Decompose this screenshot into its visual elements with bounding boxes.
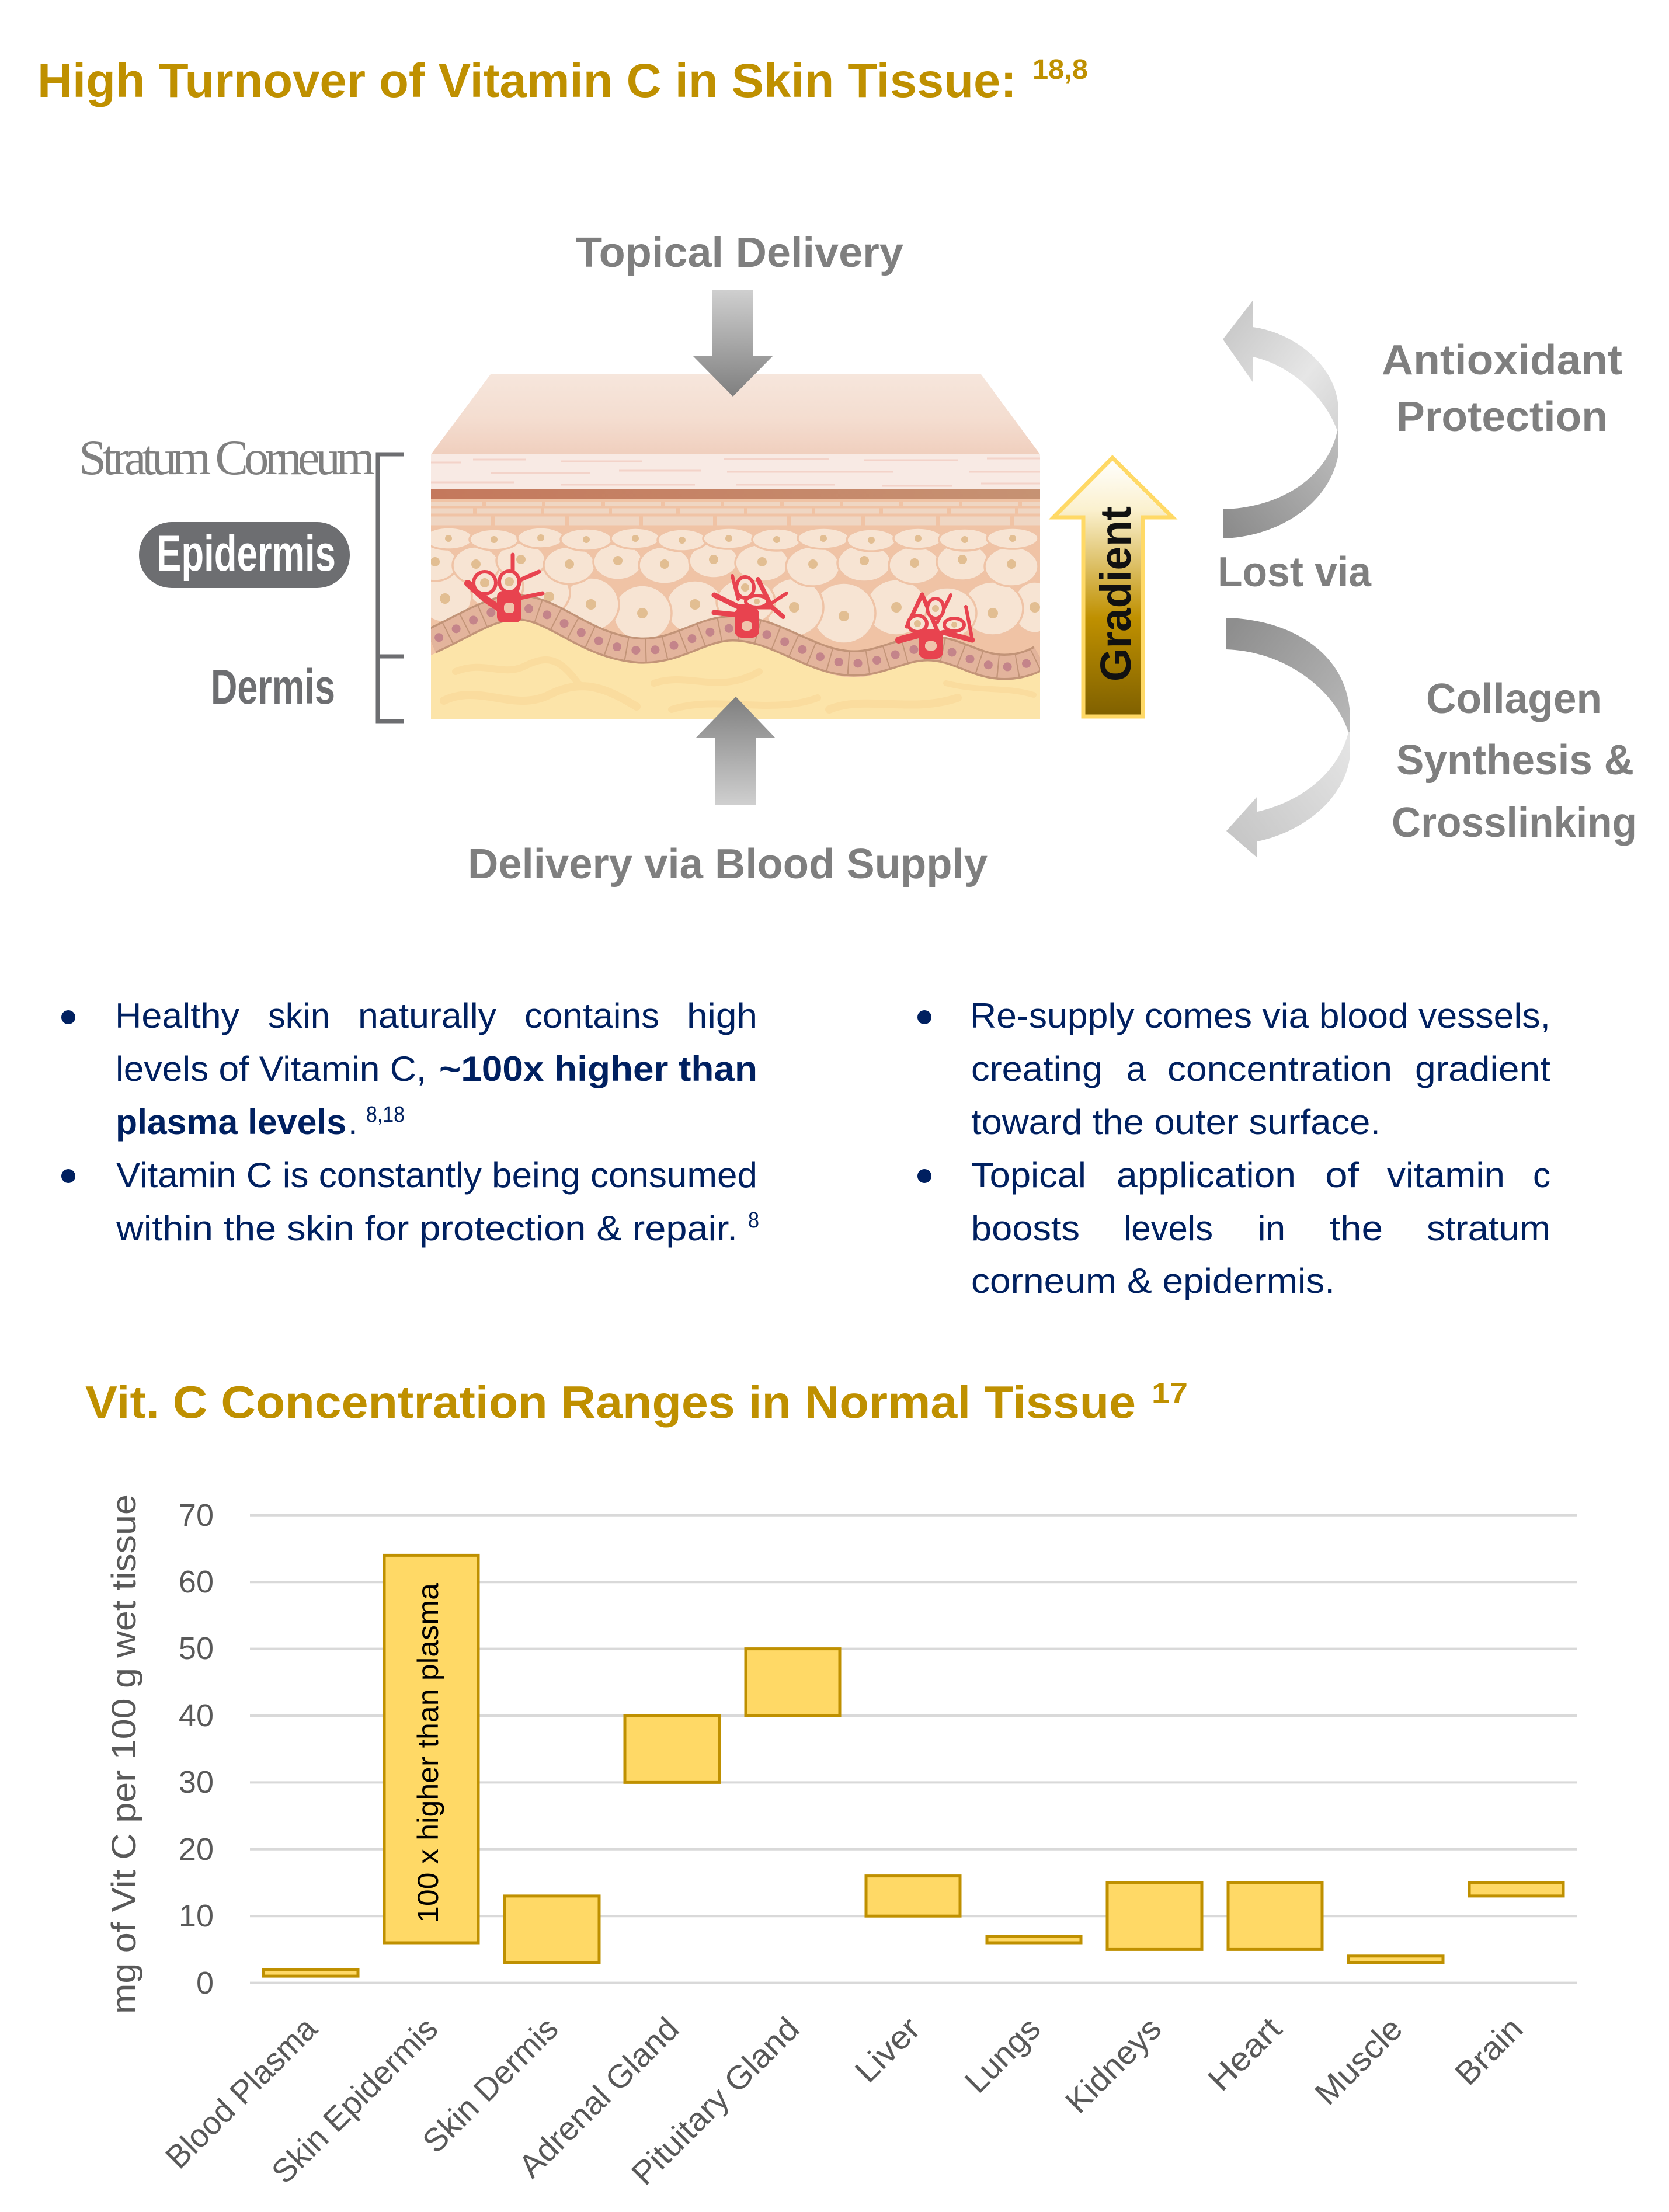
text block: left bullets: plasma levels xyxy=(116,1102,346,1142)
bar chart: vitamin C ranges xyxy=(105,1494,1577,2192)
x axis labels: Muscle xyxy=(1308,2010,1409,2112)
text block: right bullets: levels xyxy=(1124,1209,1213,1248)
arrow: gradient: Gradient xyxy=(1091,506,1140,681)
text block: left bullets: 8,18 xyxy=(366,1102,405,1127)
text block: left bullets: skin xyxy=(268,996,330,1035)
bar: kidneys xyxy=(1107,1883,1202,1949)
bar: skin epidermis xyxy=(384,1555,478,1943)
y axis title: mg of Vit C per 100 g wet tissue xyxy=(105,1494,143,2014)
text block: left bullets: levels of Vitamin C, xyxy=(116,1049,426,1088)
bar: skin epidermis: 100 x higher than plasma xyxy=(412,1583,444,1923)
label: delivery via blood supply: Delivery via Blood Supply xyxy=(468,841,988,888)
y axis ticks xyxy=(179,1498,214,2001)
label: stratum corneum: Stratum Corneum xyxy=(79,430,375,485)
bar: brain xyxy=(1469,1883,1563,1896)
bar: skin dermis xyxy=(505,1896,599,1963)
text block: right bullets: gradient xyxy=(1415,1049,1550,1088)
text block: left bullets: . xyxy=(348,1102,358,1142)
label: antioxidant protection xyxy=(1382,337,1622,440)
label: antioxidant protection: Antioxidant xyxy=(1382,337,1622,384)
y axis ticks: 10 xyxy=(179,1898,214,1933)
y axis ticks: 0 xyxy=(196,1966,214,2001)
text block: left bullets: 8 xyxy=(748,1208,759,1233)
title: High Turnover of Vitamin C in Skin Tissue: xyxy=(37,54,1017,107)
label: antioxidant protection: Protection xyxy=(1396,394,1608,440)
text block: left bullets xyxy=(61,996,759,1248)
x axis labels: Kidneys xyxy=(1058,2010,1168,2120)
bar: liver xyxy=(866,1876,960,1916)
text block: left bullets: ~100x higher than xyxy=(439,1049,757,1088)
text block: right bullets: toward the outer surface. xyxy=(971,1102,1381,1142)
panel: skin diagram xyxy=(79,229,1637,888)
arrow: topical delivery down xyxy=(693,290,773,397)
y axis ticks: 50 xyxy=(179,1631,214,1666)
curved arrow: collagen xyxy=(1226,618,1350,858)
text block: right bullets: c xyxy=(1533,1156,1550,1195)
y axis ticks: 40 xyxy=(179,1698,214,1733)
x axis labels: Heart xyxy=(1201,2010,1289,2098)
y axis ticks: 60 xyxy=(179,1564,214,1599)
x axis labels xyxy=(158,2009,1529,2192)
text block: right bullets xyxy=(917,996,1550,1300)
label: lost via: Lost via xyxy=(1218,549,1372,596)
label: collagen synthesis and crosslinking: Crosslinking xyxy=(1392,799,1637,846)
text block: left bullets: naturally xyxy=(358,996,496,1035)
text block: right bullets: stratum xyxy=(1427,1209,1550,1248)
text block: right bullets: a xyxy=(1126,1049,1146,1088)
arrow: blood supply up xyxy=(696,697,776,805)
text block: right bullets: vitamin xyxy=(1387,1156,1505,1195)
label: collagen synthesis and crosslinking xyxy=(1392,676,1637,846)
bar: pituitary gland xyxy=(746,1649,840,1716)
heading: concentration ranges: Vit. C Concentration Ranges in Normal Tissue xyxy=(85,1376,1136,1428)
bar: heart xyxy=(1228,1883,1322,1949)
text block: right bullets: Re-supply comes via blood vessels, xyxy=(970,996,1550,1035)
curved arrow: antioxidant xyxy=(1223,301,1338,538)
x axis labels: Brain xyxy=(1448,2010,1529,2092)
bar: adrenal gland xyxy=(625,1716,719,1782)
text block: right bullets: the xyxy=(1330,1209,1383,1248)
x axis labels: Skin Epidermis xyxy=(264,2010,444,2190)
heading: concentration ranges: 17 xyxy=(1152,1377,1188,1410)
x axis labels: Liver xyxy=(847,2010,927,2089)
text block: left bullets: within the skin for protection & repair. xyxy=(116,1209,738,1248)
bracket xyxy=(378,454,404,721)
x axis labels: Blood Plasma xyxy=(158,2009,324,2175)
text block: left bullets: high xyxy=(687,996,757,1035)
x axis labels: Adrenal Gland xyxy=(511,2010,686,2185)
label: epidermis pill xyxy=(139,522,350,588)
text block: left bullets: Vitamin C is constantly being consumed xyxy=(116,1156,757,1195)
arrow: gradient xyxy=(1053,458,1173,717)
label: collagen synthesis and crosslinking: Synthesis & xyxy=(1396,737,1634,784)
bar: lungs xyxy=(987,1936,1081,1943)
x axis labels: Skin Dermis xyxy=(415,2010,565,2160)
text block: left bullets: Healthy xyxy=(115,996,239,1035)
text block: right bullets: concentration xyxy=(1167,1049,1392,1088)
text block: right bullets: Topical xyxy=(971,1156,1086,1195)
label: topical delivery: Topical Delivery xyxy=(576,229,903,276)
skin cross-section illustration xyxy=(409,374,1057,719)
y axis ticks: 70 xyxy=(179,1498,214,1533)
bar: blood plasma xyxy=(263,1970,358,1976)
text block: right bullets: creating xyxy=(971,1049,1103,1088)
text block: left bullets: contains xyxy=(524,996,659,1035)
y axis ticks: 20 xyxy=(179,1832,214,1867)
text block: right bullets: corneum & epidermis. xyxy=(971,1261,1335,1300)
text block: right bullets: in xyxy=(1258,1209,1285,1248)
text block: right bullets: boosts xyxy=(971,1209,1080,1248)
x axis labels: Pituitary Gland xyxy=(624,2010,806,2192)
x axis labels: Lungs xyxy=(957,2010,1047,2100)
label: epidermis pill: Epidermis xyxy=(157,526,336,582)
melanocytes xyxy=(468,555,972,659)
text block: right bullets: of xyxy=(1325,1156,1359,1195)
title: 18,8 xyxy=(1032,54,1088,85)
label: collagen synthesis and crosslinking: Collagen xyxy=(1426,676,1602,722)
text block: right bullets: application xyxy=(1117,1156,1296,1195)
label: dermis: Dermis xyxy=(211,659,335,714)
y axis ticks: 30 xyxy=(179,1765,214,1800)
bar: muscle xyxy=(1348,1956,1443,1963)
